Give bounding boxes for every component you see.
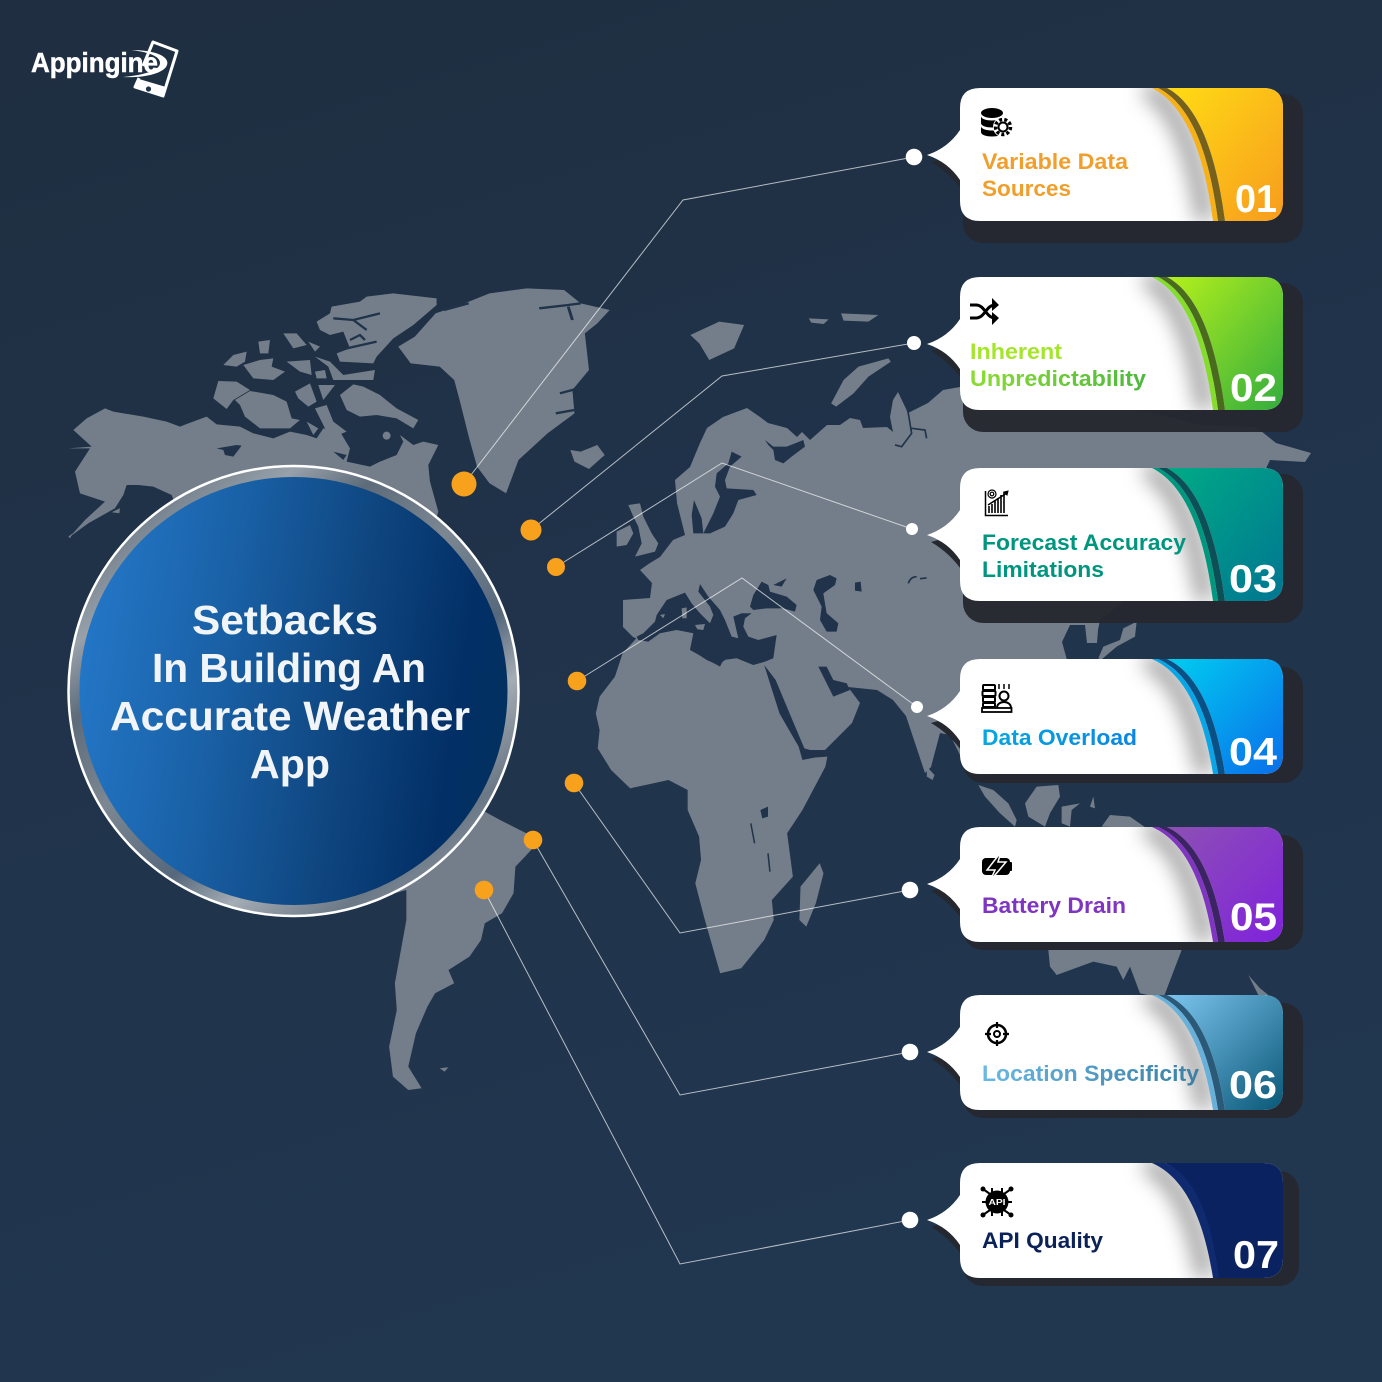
card 05: battery drain — [927, 827, 1303, 950]
map: north america and arctic islands — [68, 293, 438, 552]
card text: Limitations — [982, 557, 1104, 582]
logo: swoosh — [123, 50, 167, 77]
number: 06 — [1229, 1064, 1277, 1107]
icon: data stack and person — [982, 684, 1012, 712]
orange location dots — [452, 472, 586, 899]
number: 05 — [1230, 896, 1277, 939]
card 04: data overload — [927, 659, 1303, 783]
title text: Setbacks — [192, 597, 378, 643]
card text: Inherent — [970, 339, 1063, 364]
icon: shuffle arrows — [970, 298, 999, 325]
icon: target chart — [986, 490, 1008, 516]
number: 07 — [1233, 1234, 1279, 1277]
white connector dots — [902, 149, 923, 1228]
number: 02 — [1230, 367, 1277, 410]
card text — [982, 149, 1129, 201]
number: 03 — [1229, 558, 1277, 601]
card text: Location Specificity — [982, 1061, 1200, 1086]
map: southeast asia and australia — [978, 622, 1268, 998]
world map — [68, 288, 1311, 1090]
central circle title — [68, 466, 518, 916]
map: greenland and iceland — [398, 288, 610, 493]
logo: Appingine — [31, 47, 158, 78]
map: africa and south america — [370, 637, 934, 1090]
title text — [110, 597, 470, 787]
map: svalbard, novaya zemlya, japan — [690, 313, 891, 407]
card text: Unpredictability — [970, 366, 1147, 391]
map: european seas and british isles — [617, 400, 927, 697]
card text: API Quality — [982, 1228, 1104, 1253]
card 06: location specificity — [927, 995, 1303, 1118]
card text: Battery Drain — [982, 893, 1126, 918]
card 01: variable data sources — [927, 88, 1303, 243]
title text: Accurate Weather — [110, 693, 470, 739]
card text: Forecast Accuracy — [982, 530, 1187, 555]
card 02: inherent unpredictability — [927, 277, 1303, 432]
logo — [31, 42, 177, 97]
icon: api chip: API — [988, 1198, 1006, 1207]
card text: Sources — [982, 176, 1071, 201]
connector lines — [464, 157, 917, 1264]
logo: phone — [134, 42, 177, 97]
card text: Data Overload — [982, 725, 1137, 750]
map: eurasia — [623, 387, 1311, 775]
number: 04 — [1229, 731, 1277, 774]
card text: Variable Data — [982, 149, 1129, 174]
card text — [970, 339, 1147, 391]
icon: battery lightning — [982, 852, 1012, 881]
icon: database gear — [981, 108, 1013, 137]
title text: App — [250, 741, 330, 787]
number: 01 — [1235, 178, 1277, 221]
card text — [982, 530, 1187, 582]
card 03: forecast accuracy limitations — [927, 468, 1303, 623]
icon: api chip — [980, 1186, 1014, 1218]
card 07: api quality — [927, 1163, 1299, 1286]
icon: crosshair — [985, 1022, 1009, 1046]
title text: In Building An — [152, 645, 426, 691]
